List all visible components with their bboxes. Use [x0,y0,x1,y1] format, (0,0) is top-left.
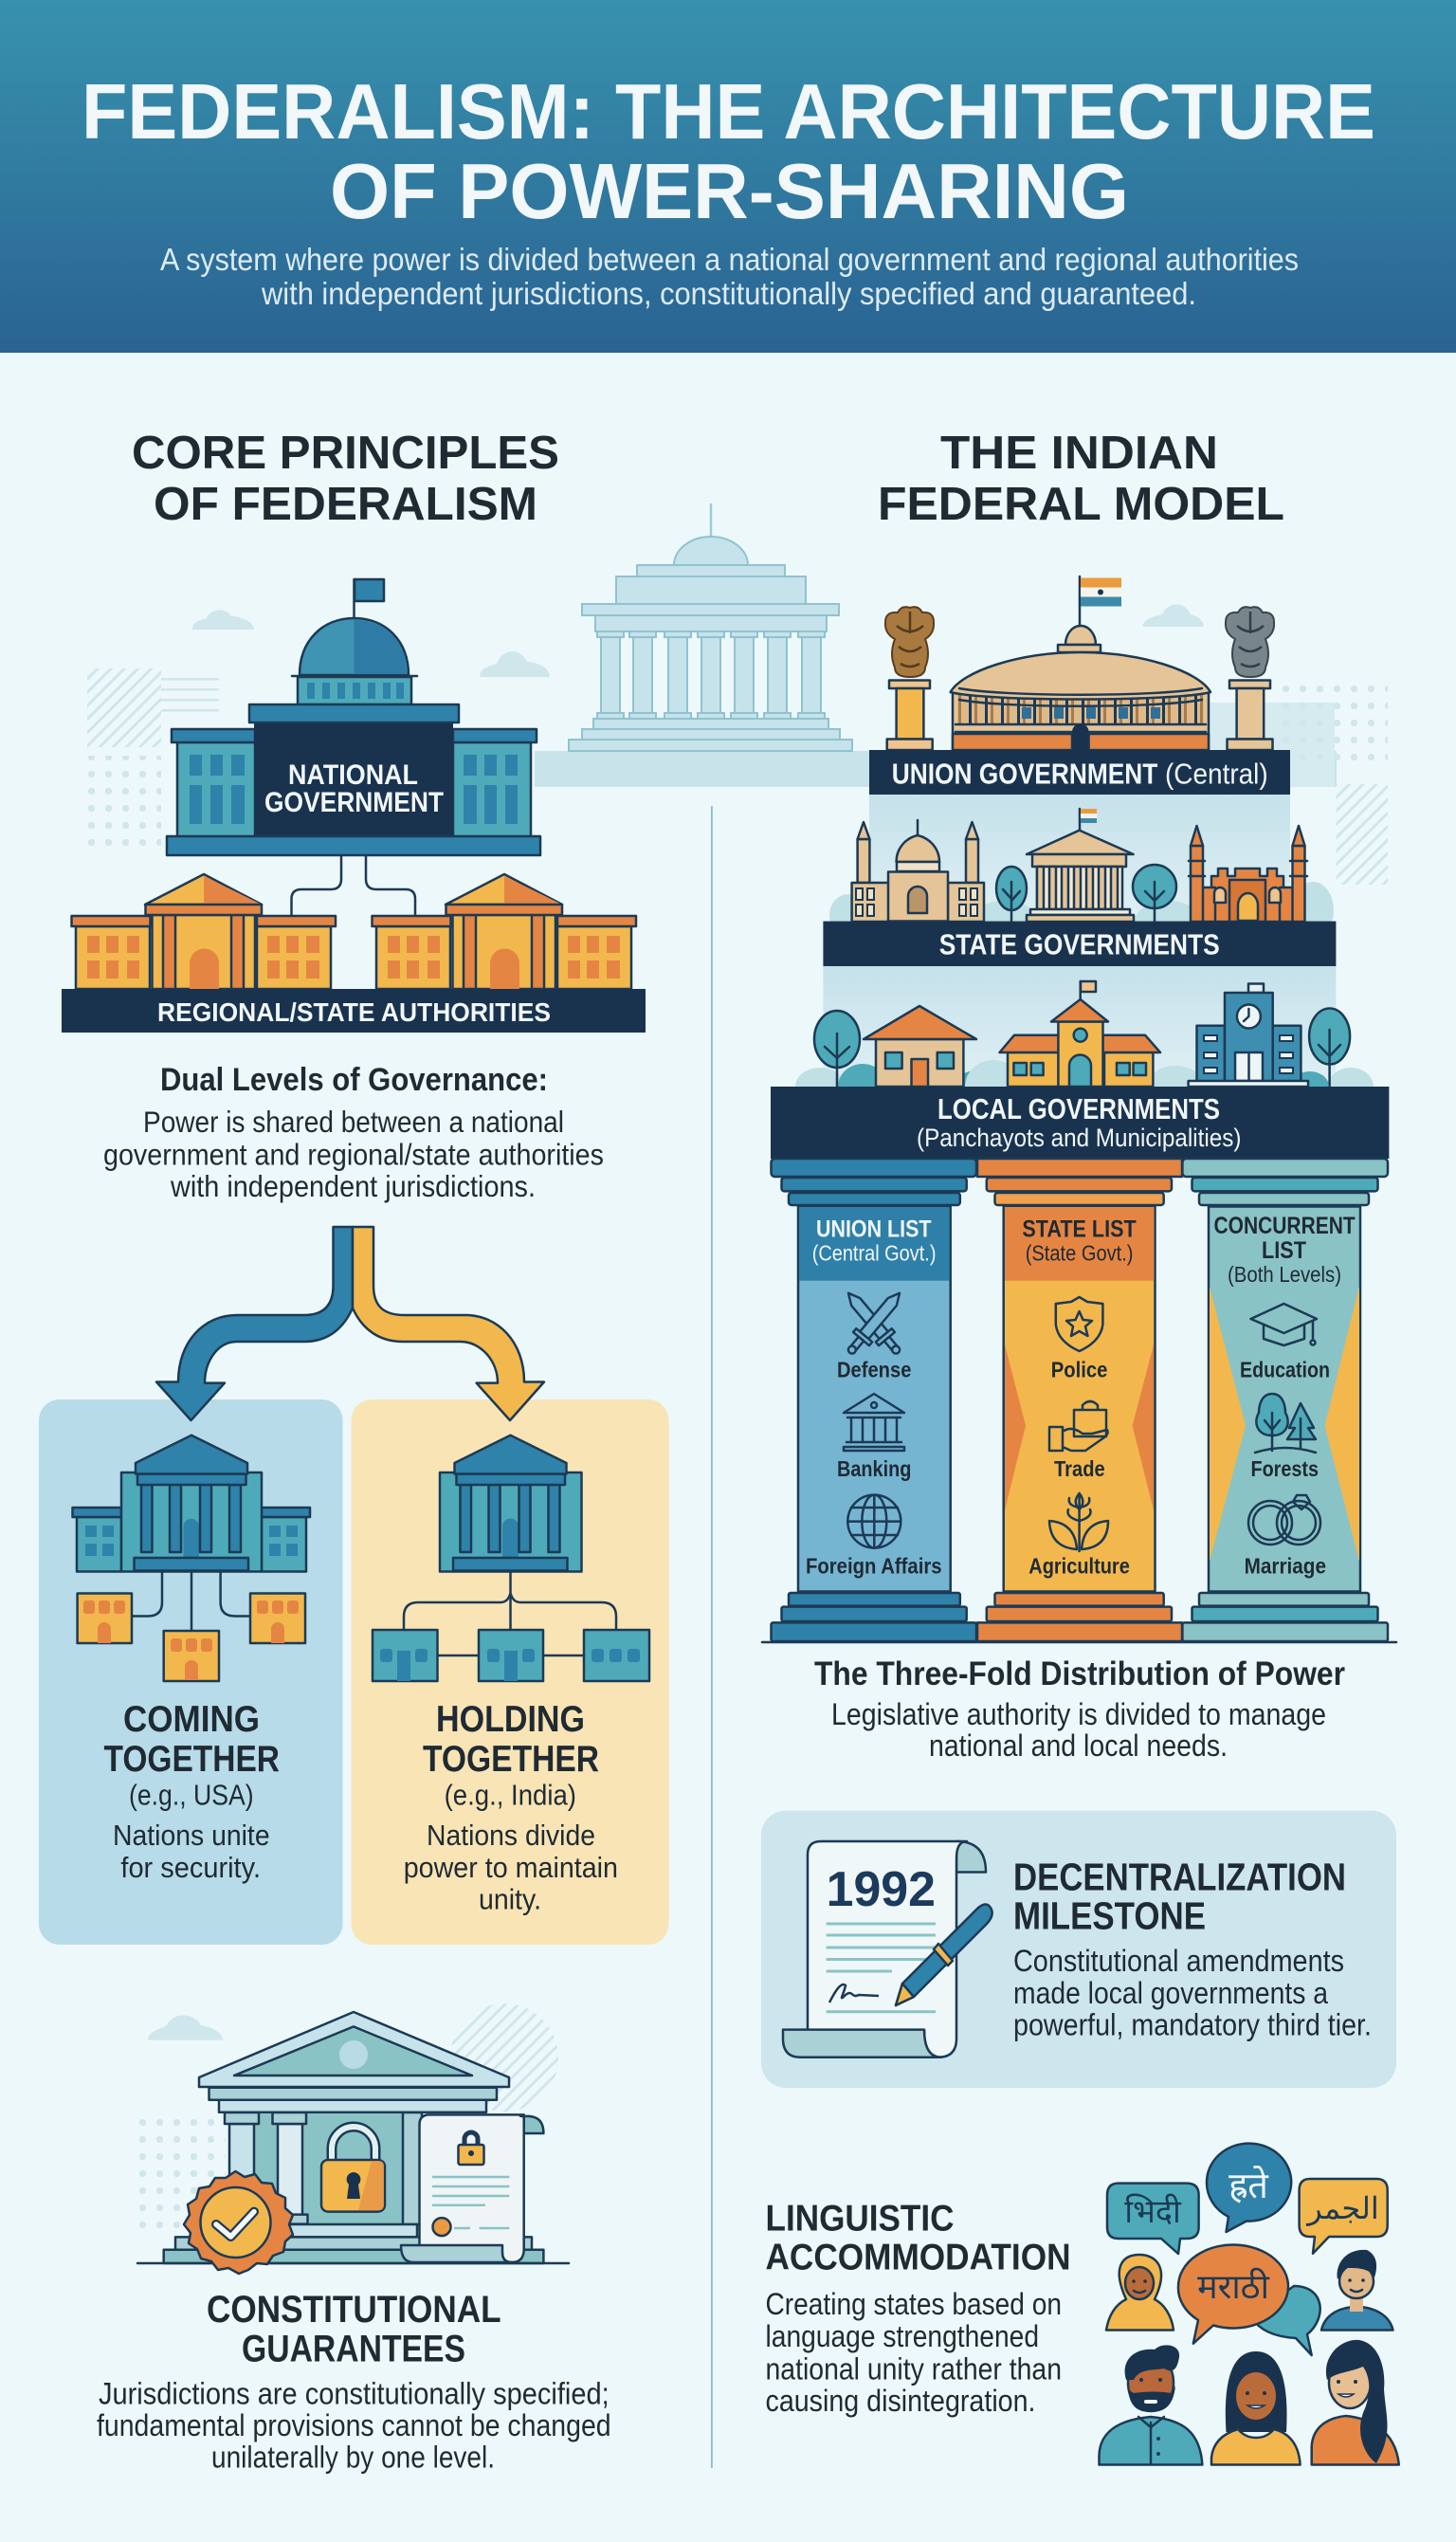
card text: for security. [120,1851,261,1884]
pillar title: (State Govt.) [1026,1240,1134,1265]
icon: padlock [321,2127,385,2212]
dual levels text block: Power is shared between a national [143,1105,564,1139]
municipal office [1189,984,1308,1087]
subtitle: with independent jurisdictions, constitutionally specified and guaranteed. [261,276,1196,311]
card text: unity. [479,1883,541,1916]
right ashoka pillar [1226,607,1274,750]
regional state authorities bar: REGIONAL/STATE AUTHORITIES [157,997,551,1027]
constitutional guarantees text: Jurisdictions are constitutionally specified; [99,2376,610,2410]
milestone text: Constitutional amendments [1013,1944,1344,1978]
heading: the indian federal model: FEDERAL MODEL [878,479,1284,530]
card text: (e.g., India) [445,1779,576,1811]
milestone text: made local governments a [1013,1976,1328,2010]
union government bar: (Central) [1165,757,1268,790]
pillar title: LIST [1262,1237,1306,1264]
constitutional guarantees text: CONSTITUTIONAL [207,2289,501,2331]
connector lines national to regional [292,855,415,916]
pillar title: UNION LIST [816,1216,931,1243]
pillar title: (Central Govt.) [812,1240,937,1265]
linguistic accommodation text [766,2199,1071,2418]
decor [135,2003,559,2237]
bubble: arabic: الجمر [1305,2191,1379,2226]
building label: NATIONAL [288,759,418,791]
icon: approval seal [184,2171,293,2274]
icon: document scroll [401,2114,543,2262]
pillar title [1022,1216,1137,1265]
card text: TOGETHER [104,1739,280,1780]
constitutional guarantees illustration [135,2003,569,2274]
card text: Nations divide [427,1819,595,1852]
union government bar: UNION GOVERNMENT [892,757,1157,790]
temple [137,2012,569,2263]
parliament rotunda [951,626,1210,750]
label: Forests [1251,1456,1319,1481]
icon: agriculture plant [1049,1493,1108,1551]
card text [404,1699,618,1916]
heading: the indian federal model: THE INDIAN [940,428,1218,479]
label: Foreign Affairs [806,1554,942,1579]
person: woman centre [1211,2351,1301,2465]
left ashoka pillar [885,607,934,750]
heading: the indian federal model [878,428,1284,530]
icon: wedding rings [1248,1495,1320,1545]
label: Agriculture [1028,1554,1130,1579]
people with language speech bubbles [1100,2144,1399,2465]
person: woman right [1312,2340,1399,2465]
icon: forest [1255,1394,1316,1453]
legislature temple [1027,831,1134,922]
connectors to states [132,1572,250,1631]
panel: decentralization milestone [761,1811,1396,2088]
pillar: concurrent list [1182,1159,1388,1641]
state governments bar: STATE GOVERNMENTS [939,927,1220,960]
subtitle: A system where power is divided between a national government and regional authorities [160,242,1299,277]
regional state authorities bar [62,989,646,1033]
hills [829,882,1334,942]
bubble: devanagari blue [1207,2144,1291,2232]
background decor left [87,610,550,849]
card text: COMING [123,1699,260,1740]
subtitle [160,242,1299,311]
fort style building [1189,826,1307,922]
icon: member states [78,1593,305,1681]
linguistic accommodation text: ACCOMMODATION [766,2238,1071,2277]
arrow: splitting blue and yellow [156,1227,544,1420]
linguistic accommodation text: Creating states based on [766,2287,1062,2321]
constitutional guarantees text: unilaterally by one level. [211,2440,495,2474]
card text [104,1699,280,1884]
bubble: hindi: भिदी [1124,2193,1182,2230]
tier panels backdrop [823,795,1336,1087]
milestone text: MILESTONE [1013,1893,1206,1937]
state flag [1080,809,1097,831]
panel: coming together [39,1399,343,1945]
icon: federal building [440,1436,582,1572]
bubble: arabic [1300,2179,1388,2254]
regional state buildings [72,874,636,989]
person: bearded man [1100,2345,1202,2465]
bubble: teal behind [1251,2286,1320,2355]
org chart connectors [404,1572,616,1655]
label: Trade [1054,1456,1105,1481]
icon: globe [847,1495,901,1548]
left tree [814,1011,860,1087]
constitutional guarantees text [97,2289,611,2474]
icon: police badge [1056,1297,1102,1351]
header banner [0,0,1456,353]
card text: power to maintain [404,1851,618,1884]
trees [996,865,1176,922]
bubble: devanagari blue: ह्रते [1228,2165,1269,2206]
pillar: union list [772,1159,976,1641]
dual levels text block: with independent jurisdictions. [170,1169,536,1203]
constitutional guarantees text: fundamental provisions cannot be changed [97,2408,611,2442]
milestone text: DECENTRALIZATION [1013,1855,1346,1898]
right tree [1309,1009,1350,1087]
taj style building [852,820,984,922]
icon: 1992 document with pen: 1992 [827,1862,936,1917]
dual levels text block [103,1062,604,1203]
pillar title [1213,1213,1356,1287]
national government building [167,579,540,855]
linguistic accommodation text: causing disintegration. [766,2384,1035,2418]
local governments bar: LOCAL GOVERNMENTS [937,1092,1220,1125]
divider line [711,806,713,2468]
panel: holding together [351,1399,669,1945]
pillar title [812,1216,937,1265]
card text: (e.g., USA) [129,1779,254,1811]
pillar title: (Both Levels) [1228,1262,1341,1287]
pillars ground line [762,1641,1396,1643]
three-fold distribution text: national and local needs. [929,1728,1228,1763]
milestone text [1013,1855,1372,2042]
house [864,1006,976,1087]
card text: HOLDING [436,1699,585,1740]
heading: core principles [132,428,559,530]
building label [264,759,444,818]
union government bar [869,750,1290,795]
person: woman in yellow scarf [1106,2255,1174,2331]
linguistic accommodation text: language strengthened [766,2319,1039,2353]
icon: graduation cap [1251,1304,1317,1345]
three-fold distribution text: The Three-Fold Distribution of Power [814,1655,1345,1692]
bubble: marathi: मराठी [1197,2267,1270,2306]
card text: TOGETHER [423,1739,599,1780]
milestone text: powerful, mandatory third tier. [1013,2008,1372,2042]
title: OF POWER-SHARING [330,147,1129,235]
pillar: state list [977,1159,1182,1641]
three-fold distribution text: Legislative authority is divided to manage [831,1697,1326,1731]
local governments bar: (Panchayots and Municipalities) [917,1124,1242,1152]
icon: 1992 document with pen [783,1841,992,2057]
constitutional guarantees text: GUARANTEES [242,2329,465,2370]
state tier illustration [829,809,1334,942]
label: Police [1051,1358,1107,1382]
local governments bar [771,1087,1389,1159]
person: young man top right [1321,2250,1393,2331]
dome [300,618,409,675]
linguistic accommodation text: LINGUISTIC [766,2199,954,2240]
wings [177,742,255,837]
three-fold distribution text [814,1655,1345,1763]
state governments bar [823,922,1336,966]
local tier illustration [795,981,1374,1113]
heading: core principles: OF FEDERALISM [154,479,537,530]
pillar title: CONCURRENT [1213,1213,1356,1239]
panchayat school [999,981,1160,1087]
icon: federal building with wings [72,1436,310,1572]
hills [795,1060,1374,1113]
central ghost temple [535,503,1337,787]
icon: bank [844,1394,904,1451]
icon: crossed swords [841,1287,907,1360]
background decor right [1143,605,1388,885]
label: Defense [837,1358,911,1382]
label: Marriage [1245,1554,1326,1579]
union tier: parliament [885,576,1274,750]
card text: Nations unite [113,1819,270,1852]
building label: GOVERNMENT [264,787,444,818]
icon: hand with bag [1049,1401,1108,1451]
dual levels text block: Dual Levels of Governance: [160,1062,548,1098]
bubble: marathi [1178,2244,1288,2344]
linguistic accommodation text: national unity rather than [766,2351,1062,2386]
flag [355,579,384,618]
heading: core principles: CORE PRINCIPLES [132,428,559,479]
label: Banking [837,1456,911,1481]
label: Education [1240,1358,1330,1382]
dual levels text block: government and regional/state authorities [103,1138,604,1172]
flag of india [1080,576,1121,626]
title [82,67,1375,235]
bubble: hindi [1107,2184,1199,2254]
title: FEDERALISM: THE ARCHITECTURE [82,67,1375,155]
icon: sub-units [373,1630,649,1681]
pillar title: STATE LIST [1022,1216,1137,1243]
